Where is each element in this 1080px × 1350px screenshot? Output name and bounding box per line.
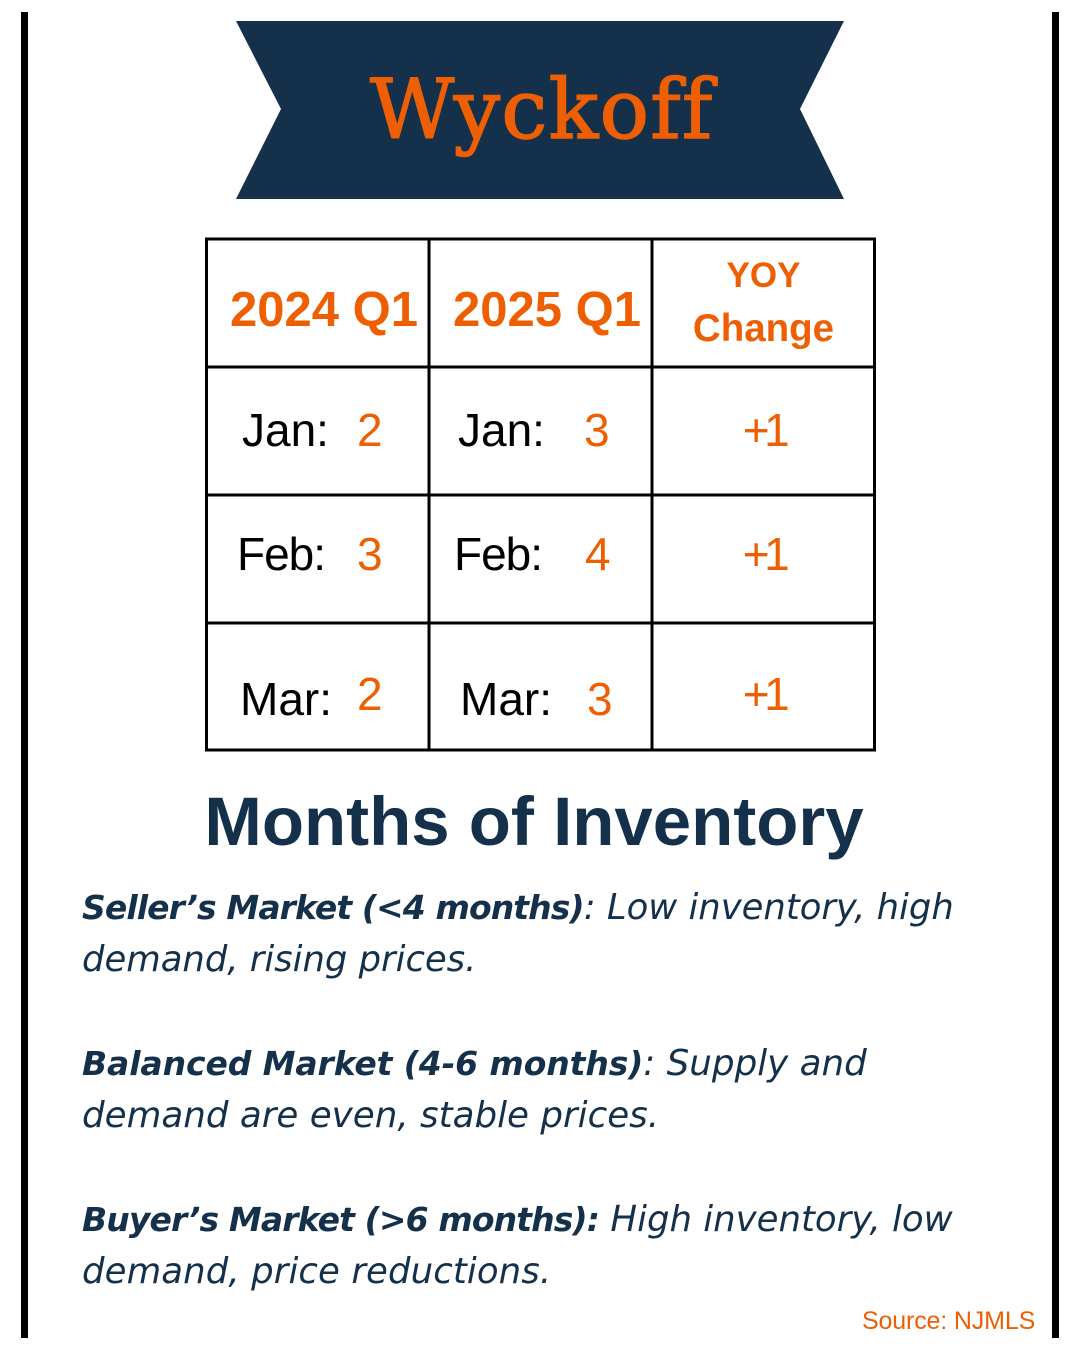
row Mar 2025: Mar: <box>460 673 552 725</box>
left border bar <box>21 12 28 1338</box>
balanced market text: Balanced Market (4-6 months): Supply and <box>82 1043 867 1084</box>
data table <box>205 238 876 752</box>
change Mar: +1 <box>743 668 784 720</box>
row Mar 2024: Mar: <box>240 673 332 725</box>
title banner: Wyckoff <box>370 63 714 158</box>
right border bar <box>1052 12 1059 1338</box>
value Mar 2024: 2 <box>357 668 383 720</box>
balanced market text <box>82 1043 867 1136</box>
row Jan 2024: Jan: <box>242 404 329 456</box>
buyer's market text <box>82 1199 953 1292</box>
title banner <box>236 21 844 199</box>
seller's market text <box>82 887 954 980</box>
value Feb 2024: 3 <box>357 528 383 580</box>
change Jan: +1 <box>743 404 784 456</box>
section heading: Months of Inventory <box>204 783 864 860</box>
header: YOY Change <box>693 256 834 350</box>
value Jan 2024: 2 <box>357 404 383 456</box>
header: YOY Change: Change <box>693 307 834 350</box>
seller's market text: Seller’s Market (<4 months): Low inventory, high <box>82 887 954 928</box>
row Jan 2025: Jan: <box>458 404 545 456</box>
row Feb 2024: Feb: <box>237 528 325 580</box>
value Feb 2025: 4 <box>585 528 611 580</box>
buyer's market text: demand, price reductions. <box>82 1251 551 1292</box>
source note: Source: NJMLS <box>862 1307 1035 1335</box>
header: 2025 Q1: 2025 Q1 <box>453 283 641 337</box>
header: YOY Change: YOY <box>727 256 800 295</box>
value Mar 2025: 3 <box>587 673 613 725</box>
change Feb: +1 <box>743 528 784 580</box>
header: 2024 Q1: 2024 Q1 <box>230 283 418 337</box>
buyer's market text: Buyer’s Market (>6 months): High inventory, low <box>82 1199 953 1240</box>
value Jan 2025: 3 <box>584 404 610 456</box>
balanced market text: demand are even, stable prices. <box>82 1095 659 1136</box>
row Feb 2025: Feb: <box>454 528 542 580</box>
seller's market text: demand, rising prices. <box>82 939 476 980</box>
